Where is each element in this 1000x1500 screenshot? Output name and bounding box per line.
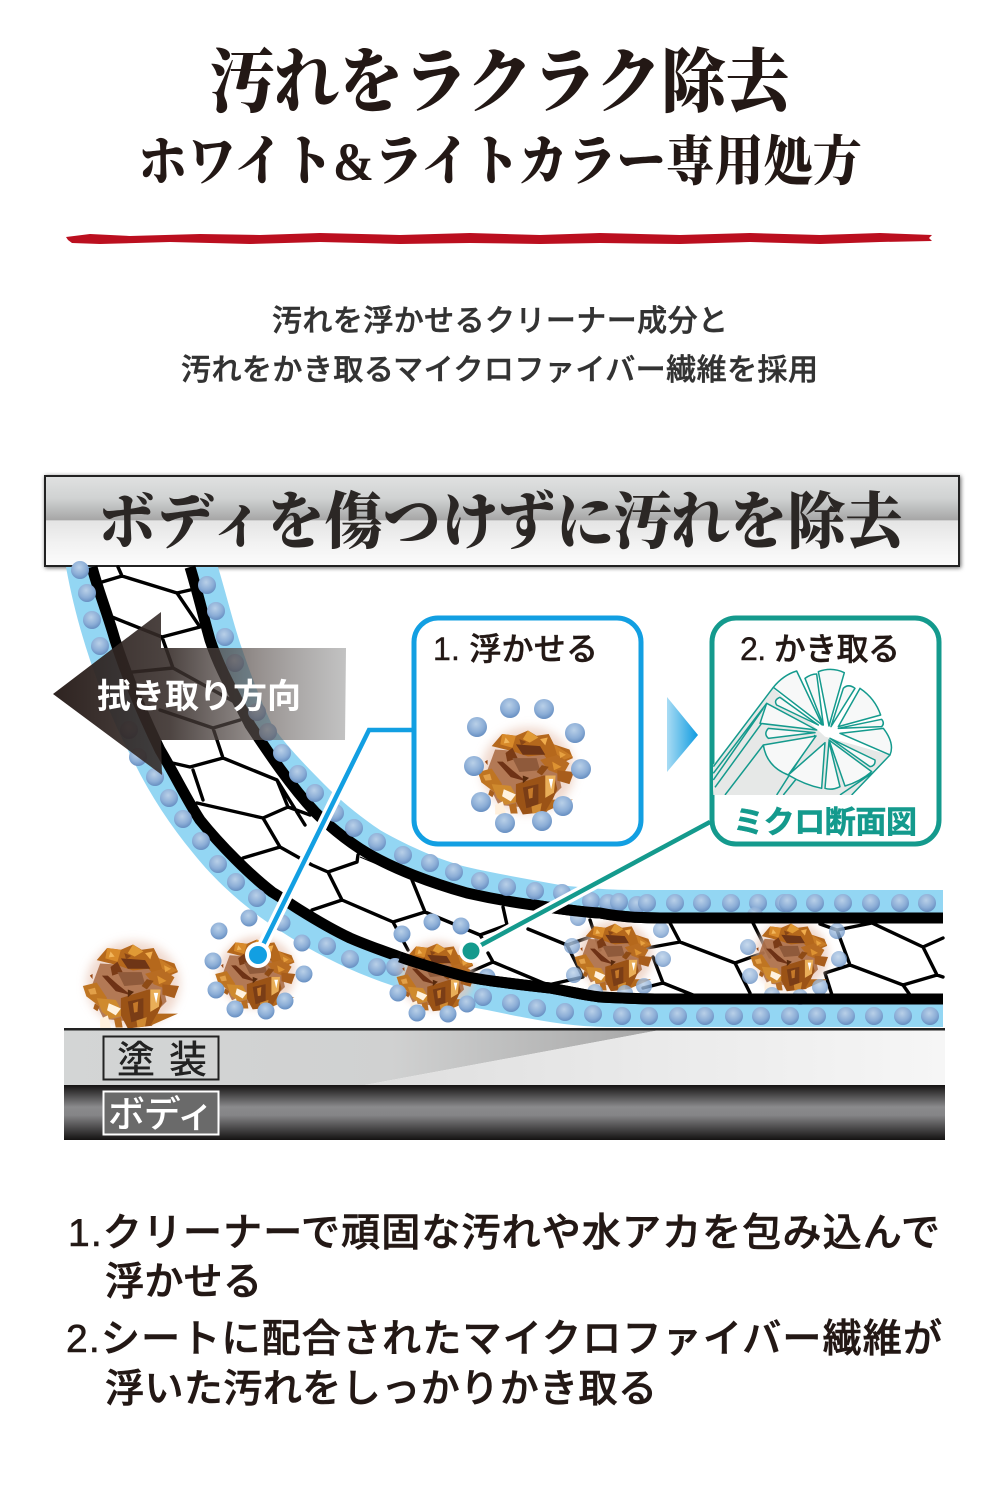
panel: step 2 wipe	[712, 618, 939, 844]
dirt particle lifted by bubbles	[204, 910, 312, 1020]
icon: dirt surrounded by cleaner bubbles	[464, 698, 591, 833]
hexagon fiber net	[102, 567, 943, 995]
dirt particle inside fiber 1	[564, 910, 671, 1001]
pointer line from float panel to dirt	[245, 730, 412, 968]
paint layer: 塗装	[117, 1040, 207, 1082]
panel: step 2 wipe: 2. かき取る	[740, 631, 900, 667]
red brush divider	[66, 233, 932, 244]
body layer	[64, 1085, 945, 1140]
intro text	[181, 305, 818, 387]
diagram: microfiber sheet on car body	[53, 561, 945, 1140]
wiping direction arrow	[53, 612, 346, 775]
dirt particle under fiber	[390, 914, 496, 1022]
sheet net white fill	[92, 567, 943, 999]
dirt particle inside fiber 2	[740, 907, 847, 1005]
intro text: 汚れをかき取るマイクロファイバー繊維を採用	[181, 354, 818, 387]
banner heading: ボディを傷つけずに汚れを除去	[98, 488, 908, 557]
body layer: ボディ	[108, 1094, 214, 1135]
title: ホワイト&ライトカラー専用処方	[138, 132, 862, 192]
explanation text list: 浮いた汚れをしっかりかき取る	[105, 1368, 657, 1411]
title	[138, 45, 862, 192]
intro text: 汚れを浮かせるクリーナー成分と	[272, 305, 728, 338]
panel: step 2 wipe: ミクロ断面図	[733, 805, 917, 840]
pointer line from wipe panel to dirt	[459, 822, 710, 963]
explanation text list: 浮かせる	[105, 1261, 262, 1304]
arrow between steps	[667, 697, 698, 772]
redraw of sheet outlines over dirt	[400, 905, 943, 999]
paint layer	[64, 1028, 945, 1085]
panel: step 1 float: 1. 浮かせる	[433, 631, 598, 667]
sheet blue band	[66, 567, 943, 1027]
title: 汚れをラクラク除去	[210, 45, 796, 122]
sheet bubbles	[71, 561, 939, 1025]
explanation text list	[66, 1212, 942, 1411]
explanation text list: 2.シートに配合されたマイクロファイバー繊維が	[66, 1318, 942, 1361]
icon: microfiber cross section	[712, 669, 891, 795]
wiping direction arrow: 拭き取り方向	[97, 678, 301, 716]
dirt particle on paint	[83, 941, 180, 1029]
explanation text list: 1.クリーナーで頑固な汚れや水アカを包み込んで	[68, 1212, 940, 1255]
black sheet outlines	[92, 567, 943, 999]
panel: step 1 float	[414, 618, 641, 844]
